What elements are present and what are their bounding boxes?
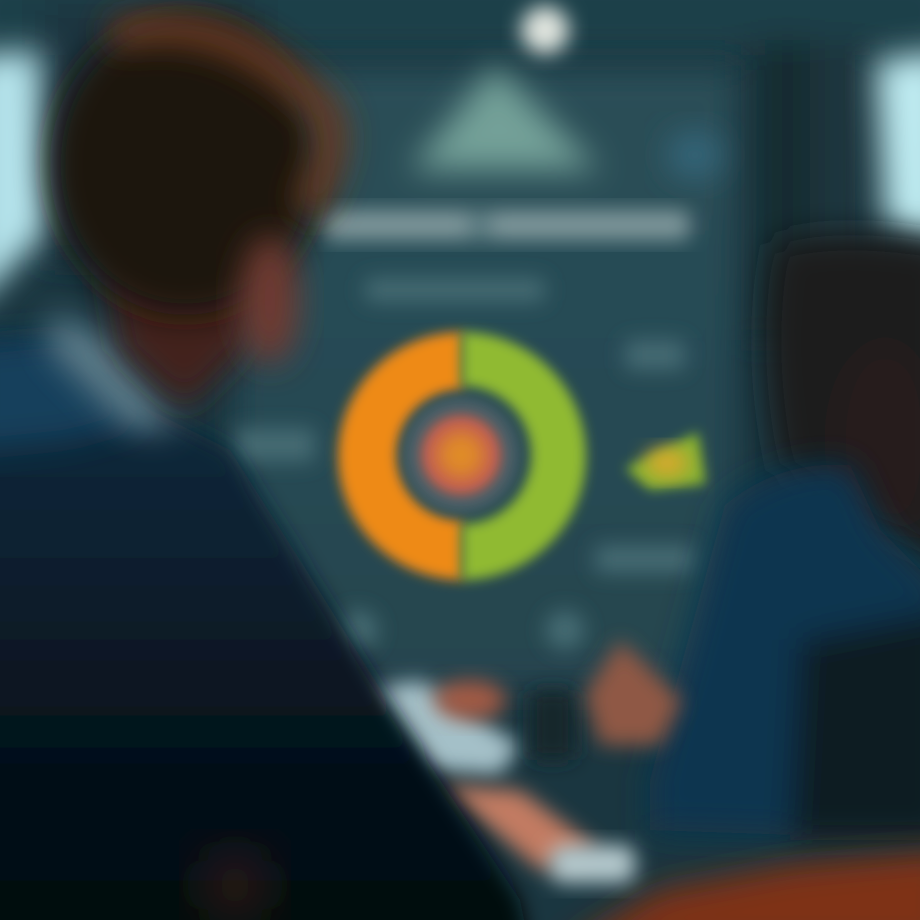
heading: blurred title band: [322, 210, 690, 240]
panel: infographic board: [235, 70, 735, 690]
target: orange centre: [436, 430, 486, 480]
hand: right: [585, 640, 682, 745]
background: wall and ceiling: [0, 0, 920, 340]
window: left: [0, 50, 48, 310]
ear and cheek: [240, 235, 300, 365]
donut ring: orange half: [338, 332, 462, 580]
target: outer ring: [403, 397, 519, 513]
collar: [50, 312, 180, 430]
lower skin glow: [207, 857, 263, 913]
icon: small green and yellow marker: [625, 432, 706, 490]
neck: [105, 235, 275, 410]
donut ring: green half: [462, 332, 586, 580]
person: woman on right: [650, 235, 920, 840]
forearm: [440, 785, 600, 870]
chart: donut with target centre: [338, 332, 586, 580]
head and hair: [50, 15, 320, 315]
paper: [365, 680, 520, 775]
hand: left: [434, 680, 506, 720]
target: red ring: [421, 415, 501, 495]
marker: green base: [625, 432, 706, 490]
cuff: [550, 845, 635, 883]
hair rim light: [110, 28, 332, 210]
text block: blurred subtitle: [235, 278, 695, 650]
window: right: [875, 50, 920, 245]
person: man in foreground: [0, 15, 530, 920]
phone: [530, 690, 575, 760]
jacket: [0, 340, 530, 920]
ceiling light: [521, 6, 569, 54]
shoulder highlight: [0, 335, 140, 450]
marker: yellow centre: [645, 449, 689, 477]
lamp shape on board: [410, 65, 600, 170]
small accent near lamp: [667, 131, 723, 179]
jacket: [650, 464, 920, 840]
hair: [766, 235, 920, 570]
table: orange foreground: [560, 850, 920, 920]
hands and papers: [365, 640, 682, 883]
